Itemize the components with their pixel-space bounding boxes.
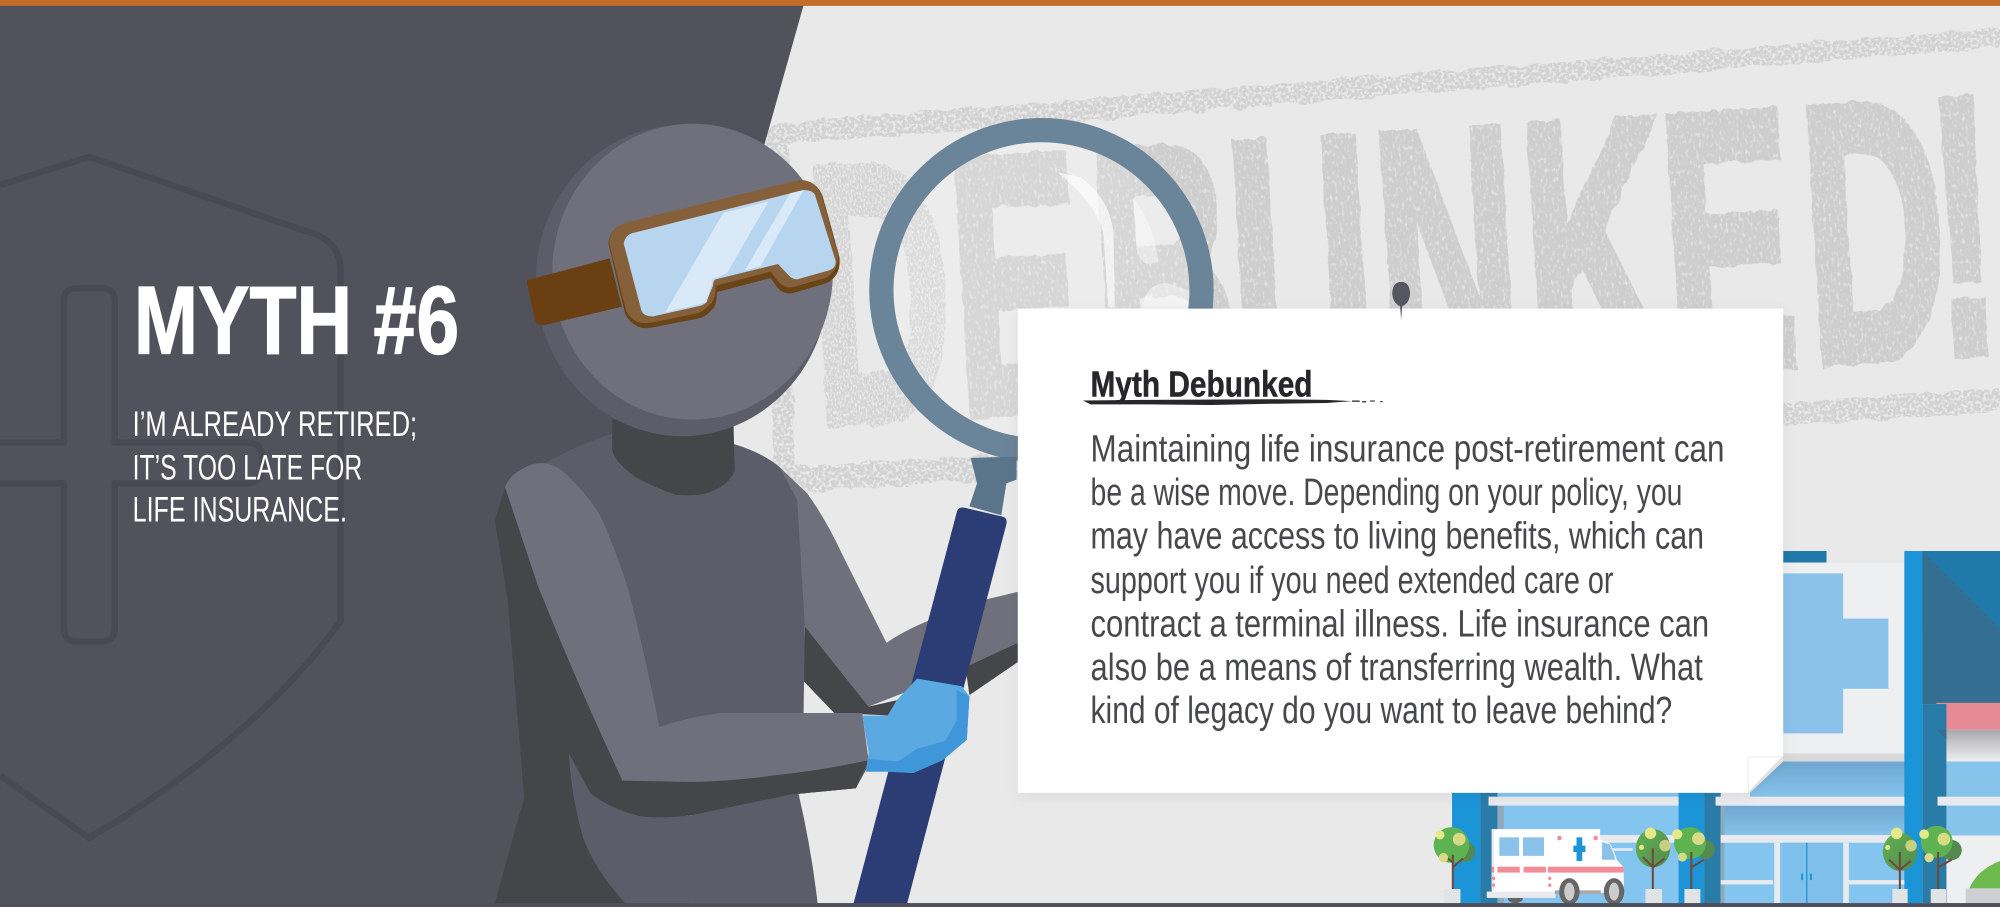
head <box>552 124 833 420</box>
heading: Myth #6: MYTH #6 <box>134 265 459 374</box>
far body shadow <box>591 760 869 817</box>
handle <box>853 507 1007 904</box>
dark panel <box>0 5 804 907</box>
magnifying glass <box>853 130 1202 904</box>
card heading: Myth Debunked <box>1091 365 1312 405</box>
stamp word remaining letters: EBUNKED! <box>940 21 2000 491</box>
side windows <box>1499 837 1519 856</box>
tree 4 <box>1883 828 1917 904</box>
myth statement: I’M ALREADY RETIRED; <box>133 405 417 444</box>
far arm <box>779 467 1018 707</box>
lower glass middle <box>1721 798 1906 903</box>
cab window <box>1602 842 1615 860</box>
stamp word first letter: D <box>797 85 962 499</box>
pin <box>1392 282 1410 320</box>
card: myth debunked <box>1018 282 1783 793</box>
myth statement: IT’S TOO LATE FOR <box>133 449 362 488</box>
body shadow <box>495 487 869 903</box>
canopy glass <box>1750 761 1906 798</box>
tree 5 <box>1919 826 1962 904</box>
wheels <box>1559 878 1580 905</box>
card body: be a wise move. Depending on your policy, you <box>1091 471 1682 513</box>
tree 2 <box>1636 828 1671 904</box>
lower right wall <box>1946 730 2000 903</box>
goggle outer edge <box>608 181 840 328</box>
lens glare thin <box>745 190 804 270</box>
top accent bar <box>0 0 2000 6</box>
myth statement <box>133 405 417 530</box>
tree 3 <box>1672 827 1715 904</box>
tree 1 <box>1434 827 1475 904</box>
torso <box>505 434 870 903</box>
medical cross <box>1573 837 1585 861</box>
hospital illustration <box>1434 551 2000 905</box>
wall shadow band <box>1783 753 1906 762</box>
card body <box>1091 428 1724 731</box>
tower shade <box>1922 551 2000 704</box>
wheel under body <box>1508 893 1523 903</box>
hospital cross <box>1783 573 1888 733</box>
card body: contract a terminal illness. Life insurance can <box>1091 602 1709 644</box>
upper wall <box>1783 563 1906 754</box>
right tower <box>1922 551 2000 704</box>
roof strip <box>1783 551 1827 562</box>
bottom strip <box>0 903 2000 907</box>
ring <box>881 130 1202 450</box>
lights <box>1492 836 1598 887</box>
lens tint <box>893 142 1189 438</box>
goggle strap <box>527 258 622 325</box>
card body: may have access to living benefits, which can <box>1091 514 1704 556</box>
brush underline <box>1083 399 1383 405</box>
lens glare blobs <box>1133 198 1190 307</box>
doors <box>1783 843 1843 904</box>
card body: Maintaining life insurance post-retirement can <box>1091 428 1724 470</box>
lens glare <box>665 202 768 312</box>
beams <box>1489 797 2000 904</box>
far arm shadow <box>804 626 1018 716</box>
goggle frame <box>609 180 838 323</box>
near arm <box>505 463 869 782</box>
card body: support you if you need extended care or <box>1091 559 1614 601</box>
ambulance <box>1487 829 1624 905</box>
card body: also be a means of transferring wealth. What <box>1091 646 1703 688</box>
card body: kind of legacy do you want to leave behind? <box>1091 689 1672 731</box>
stripe <box>1492 867 1624 873</box>
myth statement: LIFE INSURANCE. <box>133 491 347 530</box>
right planter <box>1966 861 2000 904</box>
goggle lens <box>624 190 836 316</box>
bumper <box>1487 892 1556 898</box>
ambulance body <box>1492 829 1624 893</box>
card fold <box>1748 757 1783 792</box>
card sheet <box>1018 309 1783 793</box>
head shadow <box>536 125 829 436</box>
lower glass left <box>1495 793 1681 904</box>
goggles <box>608 180 840 328</box>
collar <box>969 457 1017 515</box>
stamp border <box>767 28 2000 492</box>
icon: gloved hand <box>862 679 969 773</box>
neck <box>612 420 735 495</box>
stamp: DEBUNKED! <box>767 21 2000 499</box>
awning <box>1936 703 2000 730</box>
rear panel shade <box>1492 829 1494 890</box>
figure: person with goggles <box>495 124 1018 903</box>
icon: shield with cross outline <box>0 157 341 838</box>
pillars <box>1452 551 1946 904</box>
lens glare <box>1057 172 1115 307</box>
